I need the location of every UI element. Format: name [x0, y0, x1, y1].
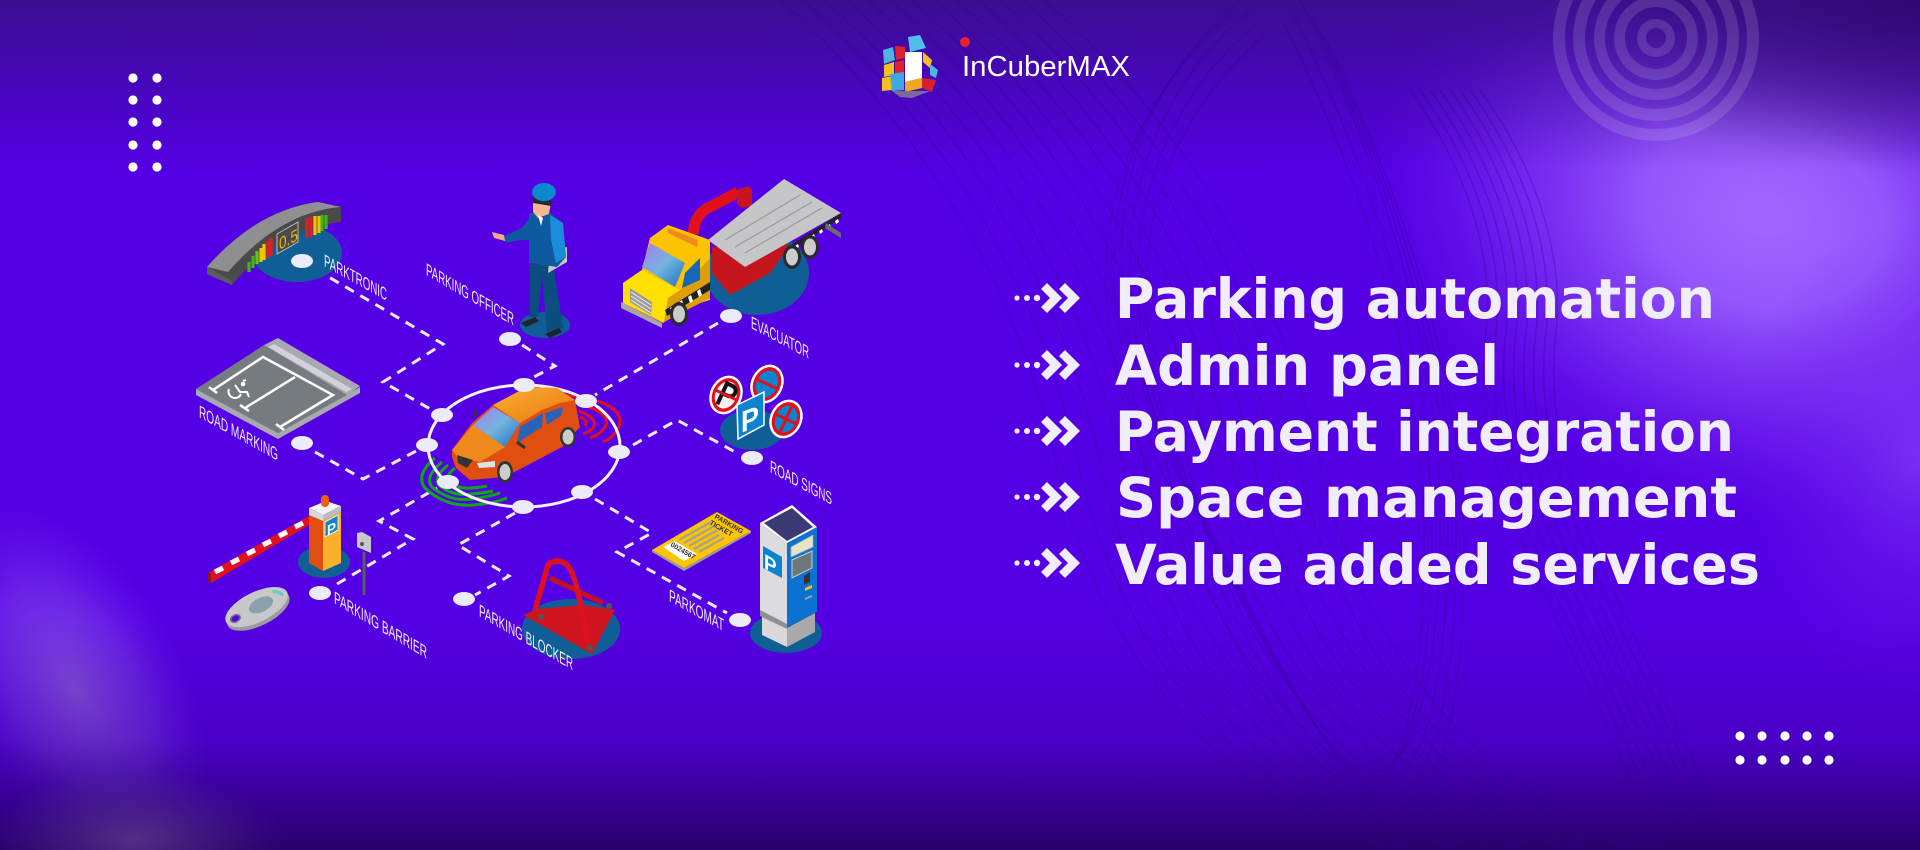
item 3: Payment integration: [1115, 400, 1734, 464]
icon: parking blocker: [522, 561, 620, 659]
dots: bottom right: [1735, 731, 1834, 765]
icon: parking barrier: [208, 495, 371, 639]
key fob: [219, 579, 295, 639]
feature list: [1014, 267, 1760, 597]
icon: parking ticket: [652, 512, 751, 571]
icon: parkomat: [750, 505, 822, 653]
sign: no parking: [703, 370, 749, 420]
parking diagram: [196, 179, 841, 675]
node: [499, 332, 521, 346]
concentric circles decoration: [1559, 0, 1753, 135]
arrow 1: [1014, 283, 1080, 313]
label: road marking: ROAD MARKING: [199, 401, 278, 465]
red dot: [960, 37, 970, 47]
icon: car: [452, 387, 580, 483]
logo wordmark: InCuberMAX: [962, 51, 1130, 83]
label: road signs: ROAD SIGNS: [770, 456, 832, 509]
node: [453, 592, 475, 606]
item 4: Space management: [1116, 466, 1737, 530]
icon: parktronic display: [207, 202, 342, 285]
label: parking barrier: PARKING BARRIER: [334, 588, 427, 663]
icon: road marking: [196, 338, 360, 439]
green sensor arcs: [422, 458, 507, 505]
icon: parking ticket: TICKET: [708, 520, 734, 539]
item 2: Admin panel: [1115, 334, 1499, 398]
node: [291, 254, 313, 268]
node: [741, 451, 763, 465]
icon: rubik cube: [882, 35, 938, 98]
label: parkomat: PARKOMAT: [669, 585, 724, 635]
item 1: Parking automation: [1115, 267, 1715, 331]
sign: parking: [737, 392, 764, 439]
node: [729, 613, 751, 627]
icon: road signs: [703, 359, 809, 450]
icon: parkomat: P: [764, 549, 777, 580]
item 5: Value added services: [1115, 533, 1760, 597]
icon: parking ticket: PARKING: [713, 514, 745, 536]
node: [309, 586, 331, 600]
red sensor arcs: [563, 395, 620, 442]
dashed connectors: [315, 269, 737, 613]
ring nodes: [416, 378, 630, 514]
label: parking officer: PARKING OFFICER: [426, 260, 514, 330]
sign: no stopping right: [763, 394, 809, 444]
icon: road signs: P: [741, 400, 759, 440]
icon: parktronic display: 0.5: [279, 225, 298, 254]
node: [720, 309, 742, 323]
dots: top left: [128, 73, 162, 172]
arrow 4: [1014, 482, 1080, 512]
sign: no stopping back: [744, 359, 790, 409]
icon: parking officer: [492, 183, 570, 338]
icon: tow truck: [621, 179, 841, 328]
arrow 3: [1014, 416, 1080, 446]
icon: parking ticket: 0024567: [669, 542, 696, 561]
sensor post: [362, 552, 366, 595]
label: parking blocker: PARKING BLOCKER: [479, 601, 573, 675]
label: parktronic: PARKTRONIC: [324, 250, 387, 305]
arrow 2: [1014, 350, 1080, 380]
node: [291, 436, 313, 450]
icon: parking barrier: P: [327, 520, 336, 540]
label: evacuator: EVACUATOR: [751, 312, 809, 363]
sensor ring: [428, 385, 620, 507]
arrow 5: [1014, 548, 1080, 578]
logo: [882, 35, 1130, 98]
